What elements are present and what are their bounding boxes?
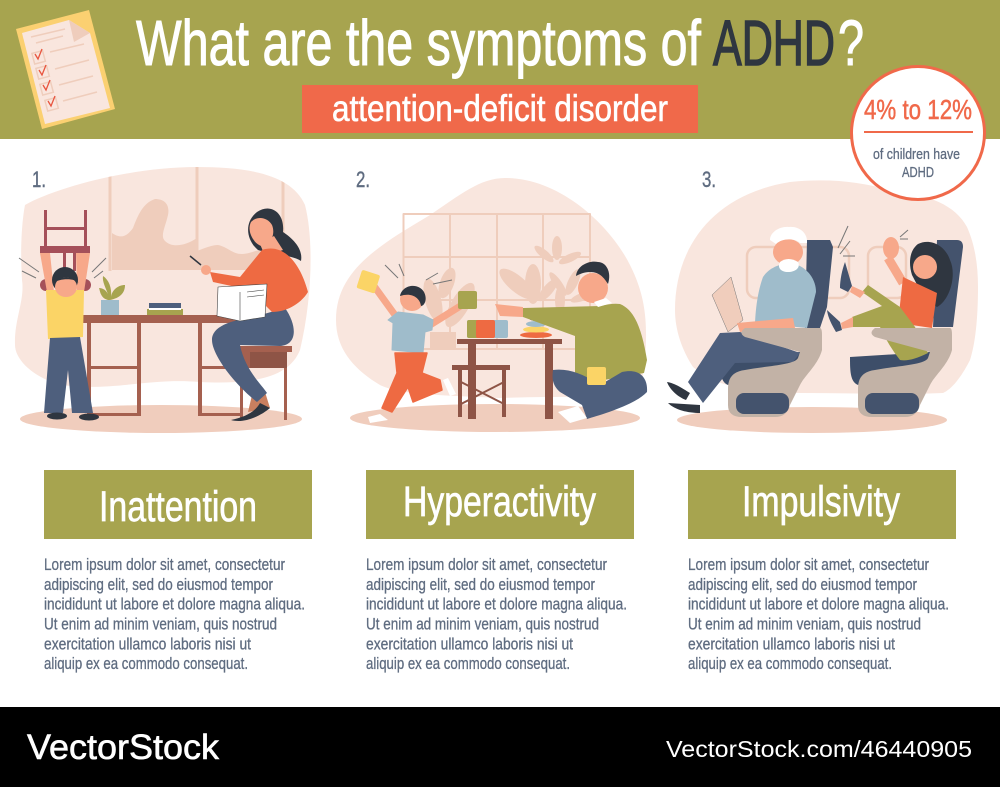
panel: inattention illustration (15, 160, 311, 433)
text block: inattention (44, 555, 305, 673)
running boy with blocks (356, 264, 477, 423)
text block: impulsivity: Ut enim ad minim veniam, quis nostrud (688, 614, 921, 634)
text block: inattention: aliquip ex ea commodo consequat. (44, 654, 248, 673)
background blob (336, 178, 646, 398)
heading: inattention (44, 470, 312, 539)
title: ADHD (713, 7, 835, 79)
step number 3: 3. (702, 167, 716, 192)
ground (350, 404, 640, 432)
text block: hyperactivity: Ut enim ad minim veniam, quis nostrud (366, 614, 599, 634)
heading: hyperactivity: Hyperactivity (403, 478, 596, 526)
text block: inattention: Ut enim ad minim veniam, quis nostrud (44, 614, 277, 634)
boy lifting chair (19, 210, 106, 420)
toy blocks and stacking rings (467, 310, 552, 338)
statistic callout: ADHD (902, 164, 934, 181)
elderly man in seat (667, 227, 833, 417)
text block: impulsivity: Lorem ipsum dolor sit amet, consectetur (688, 555, 929, 574)
window frame (403, 214, 590, 349)
text block: impulsivity: adipiscing elit, sed do eiusmod tempor (688, 575, 917, 594)
text block: impulsivity: aliquip ex ea commodo consequat. (688, 654, 892, 673)
text block: inattention: Lorem ipsum dolor sit amet, consectetur (44, 555, 285, 574)
step number 2: 2. (356, 167, 370, 192)
subtitle banner: attention-deficit disorder (332, 88, 668, 129)
background blob (675, 180, 978, 394)
footer bar: VectorStock (27, 728, 220, 767)
ground (677, 407, 947, 433)
header band (0, 0, 1000, 139)
text block: hyperactivity: aliquip ex ea commodo consequat. (366, 654, 570, 673)
plant and books (99, 276, 183, 315)
step number 1: 1. (32, 167, 46, 192)
footer bar: VectorStock.com/46440905 (666, 736, 972, 762)
table (83, 315, 240, 416)
statistic callout: 4% to 12% (864, 94, 972, 125)
background plants (420, 236, 595, 350)
airplane windows (747, 247, 906, 298)
ground (20, 405, 302, 433)
heading: inattention: Inattention (99, 483, 257, 531)
text block: hyperactivity: adipiscing elit, sed do eiusmod tempor (366, 575, 595, 594)
background blob (15, 167, 311, 387)
text block: inattention: adipiscing elit, sed do eiusmod tempor (44, 575, 273, 594)
icon: checklist document (16, 10, 115, 129)
panel: impulsivity illustration (667, 180, 978, 433)
heading: impulsivity (688, 470, 956, 539)
heading: hyperactivity (366, 470, 634, 539)
girl kicking seat (827, 226, 963, 417)
text block: inattention: incididunt ut labore et dolore magna aliqua. (44, 594, 305, 614)
footer bar (0, 707, 1000, 787)
statistic callout: of children have (873, 146, 960, 163)
teacher with book (190, 209, 308, 421)
text block: impulsivity: exercitation ullamco laboris nisi ut (688, 634, 895, 654)
window with curtains (110, 160, 283, 271)
statistic callout (852, 66, 984, 200)
text block: inattention: exercitation ullamco laboris nisi ut (44, 634, 251, 654)
father sitting on floor (495, 262, 647, 423)
text block: hyperactivity (366, 555, 627, 673)
panel: hyperactivity illustration (336, 178, 647, 432)
title: ? (838, 7, 864, 79)
text block: hyperactivity: exercitation ullamco laboris nisi ut (366, 634, 573, 654)
text block: hyperactivity: incididunt ut labore et dolore magna aliqua. (366, 594, 627, 614)
play table and stool (452, 339, 562, 419)
text block: hyperactivity: Lorem ipsum dolor sit amet, consectetur (366, 555, 607, 574)
heading: impulsivity: Impulsivity (742, 478, 900, 526)
text block: impulsivity (688, 555, 949, 673)
title: What are the symptoms of (136, 7, 701, 79)
